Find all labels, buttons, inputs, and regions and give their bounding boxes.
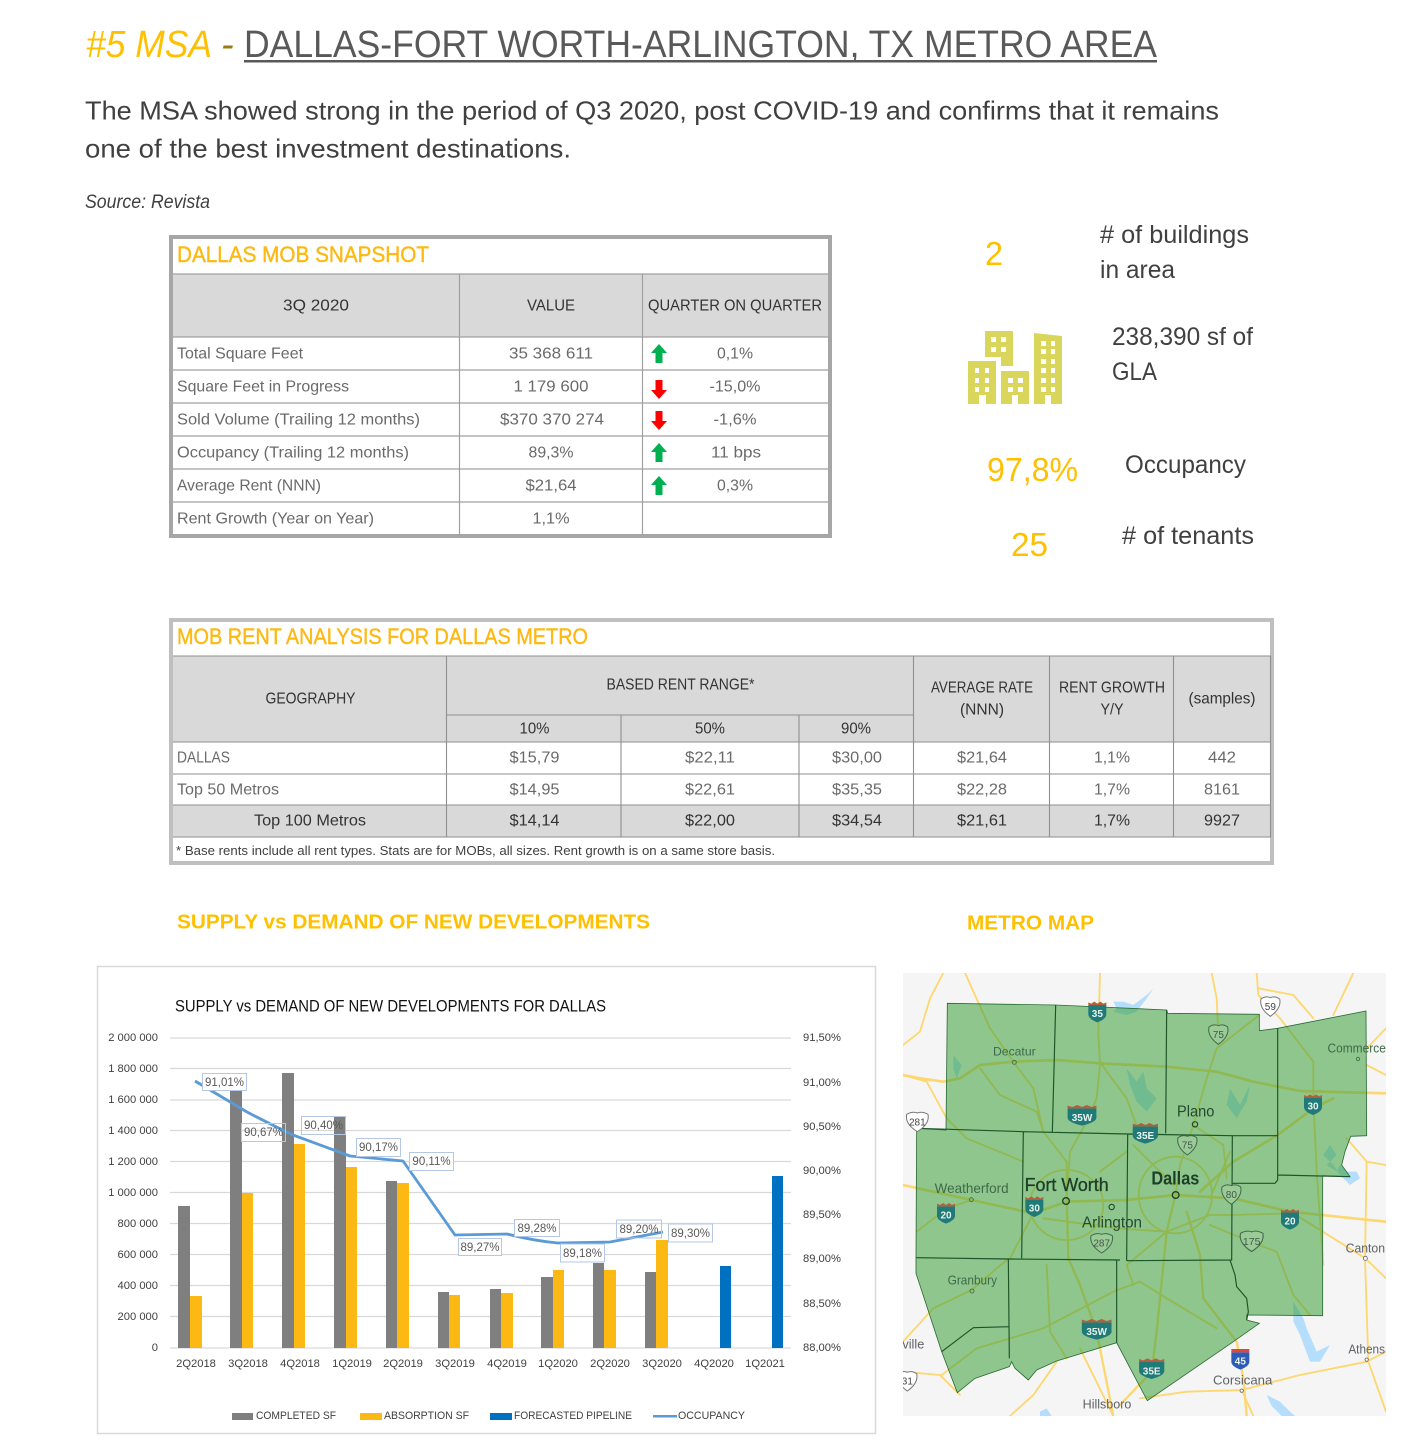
row: Top 100 Metros: Top 100 Metros <box>254 813 366 830</box>
absorption SF bars <box>190 1144 668 1348</box>
occupancy data labels: 89,18% <box>563 1248 602 1260</box>
map interstate shields: 35E <box>1136 1131 1155 1142</box>
chart legend: OCCUPANCY <box>678 1410 746 1422</box>
right axis labels <box>803 1032 841 1354</box>
row: Dallas: $21,64 <box>957 749 1007 766</box>
row: Top 100 Metros: 1,7% <box>1094 813 1130 830</box>
map interstate shields: 30 <box>1307 1102 1319 1113</box>
quarter on quarter values: 0,3% <box>717 477 753 494</box>
category axis labels <box>176 1358 785 1370</box>
map roads <box>903 973 1386 1416</box>
occupancy data labels: 89,20% <box>619 1224 659 1236</box>
map place labels: Canton <box>1346 1241 1385 1255</box>
map county borders <box>916 1005 1350 1358</box>
map county overlay <box>916 1003 1367 1401</box>
map place labels <box>902 1041 1386 1412</box>
forecasted pipeline bars <box>720 1176 783 1348</box>
snapshot row labels: Occupancy (Trailing 12 months) <box>177 444 409 461</box>
title: DALLAS-FORT WORTH-ARLINGTON, TX METRO AREA <box>244 24 1158 66</box>
category axis labels: 2Q2019 <box>383 1358 423 1370</box>
left axis labels: 400 000 <box>118 1280 158 1292</box>
row: Top 50 Metros: $35,35 <box>832 781 882 798</box>
map US route shields: 287 <box>1093 1239 1110 1250</box>
map US route shields: 59 <box>1265 1002 1276 1013</box>
table footnote: * Base rents include all rent types. Stats are for MOBs, all sizes. Rent growth is on a same store basis. <box>176 843 775 858</box>
rent analysis header: 10% <box>520 721 550 738</box>
map place labels: Plano <box>1177 1103 1214 1120</box>
occupancy data labels: 89,28% <box>517 1223 557 1235</box>
intro text: one of the best investment destinations. <box>85 134 571 164</box>
map US route shields: 281 <box>909 1117 926 1128</box>
map place labels: ville <box>902 1337 924 1351</box>
category axis labels: 4Q2019 <box>487 1358 527 1370</box>
category axis labels: 4Q2020 <box>694 1358 734 1370</box>
category axis labels: 3Q2019 <box>435 1358 475 1370</box>
heading: metro map: METRO MAP <box>967 912 1094 934</box>
stat: occupancy: Occupancy <box>1125 451 1246 479</box>
map US route shields: 80 <box>1226 1190 1237 1201</box>
right axis labels: 90,00% <box>803 1165 841 1177</box>
map interstate shields: 35W <box>1086 1327 1108 1338</box>
rent analysis header: BASED RENT RANGE* <box>606 677 754 694</box>
title: #5 MSA <box>86 24 212 66</box>
map place labels: Corsicana <box>1213 1372 1273 1387</box>
snapshot row labels: Square Feet in Progress <box>177 378 349 395</box>
rent analysis header: (NNN) <box>960 702 1004 719</box>
quarter on quarter values: 0,1% <box>717 345 753 362</box>
row: Top 50 Metros: $22,61 <box>685 781 735 798</box>
left axis labels: 800 000 <box>118 1218 158 1230</box>
rent analysis header: RENT GROWTH <box>1059 680 1165 697</box>
row: Top 50 Metros <box>177 781 1240 798</box>
row: Dallas: 1,1% <box>1094 749 1130 766</box>
category axis labels: 4Q2018 <box>280 1358 320 1370</box>
left axis labels: 600 000 <box>118 1249 158 1261</box>
source note: Source: Revista <box>85 192 210 213</box>
rent analysis header <box>266 677 1256 738</box>
category axis labels: 1Q2019 <box>332 1358 372 1370</box>
panel: metro map <box>902 973 1386 1416</box>
completed SF bars <box>178 1073 656 1348</box>
panel: Dallas MOB snapshot table <box>171 237 830 536</box>
occupancy data labels: 90,67% <box>244 1127 283 1139</box>
category axis labels: 3Q2020 <box>642 1358 682 1370</box>
left axis labels: 1 800 000 <box>108 1063 158 1075</box>
row: Top 100 Metros: $14,14 <box>510 813 560 830</box>
chart legend <box>232 1410 746 1422</box>
left axis labels: 2 000 000 <box>108 1032 158 1044</box>
quarter on quarter values <box>710 345 761 494</box>
map US route shields: 75 <box>1182 1141 1193 1152</box>
row: Top 100 Metros: $22,00 <box>685 813 735 830</box>
row: Top 50 Metros: $14,95 <box>510 781 560 798</box>
right axis labels: 90,50% <box>803 1121 841 1133</box>
panel: MOB rent analysis table <box>171 620 1272 863</box>
row: Top 50 Metros: Top 50 Metros <box>177 781 279 798</box>
map interstate shields: 35W <box>1072 1113 1093 1124</box>
left axis labels: 0 <box>152 1342 158 1354</box>
stat: buildings: 2 <box>985 235 1003 272</box>
rent analysis header: 90% <box>841 721 871 738</box>
map US route shields <box>898 997 1280 1391</box>
row: Top 50 Metros: 1,7% <box>1094 781 1130 798</box>
snapshot header row <box>283 298 822 315</box>
stat: buildings: # of buildings <box>1100 221 1249 249</box>
rent analysis header: (samples) <box>1188 691 1256 708</box>
snapshot row labels <box>177 345 420 527</box>
right axis labels: 89,50% <box>803 1209 841 1221</box>
stat: tenants: # of tenants <box>1122 522 1254 550</box>
stat: buildings: in area <box>1100 256 1175 284</box>
quarter on quarter values: 11 bps <box>711 444 761 461</box>
snapshot heading: DALLAS MOB SNAPSHOT <box>177 242 429 267</box>
snapshot values: $21,64 <box>526 477 577 494</box>
rent analysis heading: MOB RENT ANALYSIS FOR DALLAS METRO <box>177 624 588 649</box>
row: Dallas: $15,79 <box>510 749 560 766</box>
occupancy data labels: 89,27% <box>460 1242 500 1254</box>
row: Dallas: DALLAS <box>177 749 230 766</box>
map interstate shields: 45 <box>1235 1356 1246 1367</box>
right axis labels: 88,50% <box>803 1298 841 1310</box>
category axis labels: 3Q2018 <box>228 1358 268 1370</box>
row: Top 100 Metros <box>254 813 1240 830</box>
panel: building stats <box>968 221 1254 563</box>
rent analysis header: GEOGRAPHY <box>266 691 356 708</box>
stat: occupancy <box>987 451 1246 488</box>
snapshot values: 1,1% <box>532 510 570 527</box>
left axis labels: 1 400 000 <box>108 1125 158 1137</box>
map place labels: Commerce <box>1328 1041 1386 1055</box>
quarter on quarter values: -15,0% <box>710 378 760 395</box>
map water <box>953 988 1360 1416</box>
left axis labels: 200 000 <box>118 1311 158 1323</box>
right axis labels: 89,00% <box>803 1253 841 1265</box>
map interstate shields: 20 <box>1284 1216 1296 1227</box>
snapshot values <box>500 345 604 527</box>
map place labels: Decatur <box>993 1045 1036 1059</box>
stat: GLA <box>1112 323 1253 386</box>
snapshot values: 1 179 600 <box>514 378 589 395</box>
map place labels: Fort Worth <box>1025 1174 1109 1195</box>
row: Top 100 Metros: 9927 <box>1204 813 1240 830</box>
left axis labels: 1 200 000 <box>108 1156 158 1168</box>
snapshot row labels: Sold Volume (Trailing 12 months) <box>177 411 420 428</box>
map interstate shields: 30 <box>1029 1204 1040 1215</box>
occupancy data labels: 90,11% <box>412 1156 451 1168</box>
right axis labels: 88,00% <box>803 1342 841 1354</box>
row: Dallas: 442 <box>1208 749 1236 766</box>
row: Dallas <box>177 749 1236 766</box>
map place labels: Hillsboro <box>1083 1398 1131 1412</box>
icon: buildings <box>968 331 1062 404</box>
row: Top 100 Metros: $34,54 <box>832 813 882 830</box>
panel: supply vs demand chart <box>98 966 876 1434</box>
row: Dallas: $22,11 <box>685 749 735 766</box>
occupancy data labels: 91,01% <box>205 1077 244 1089</box>
map interstate shields <box>937 1002 1322 1379</box>
map interstate shields: 35E <box>1143 1366 1161 1377</box>
row: Top 100 Metros: $21,61 <box>957 813 1007 830</box>
category axis labels: 2Q2018 <box>176 1358 216 1370</box>
stat: GLA: GLA <box>1112 358 1157 386</box>
quarter on quarter values: -1,6% <box>714 411 756 428</box>
chart legend: ABSORPTION SF <box>384 1410 469 1422</box>
snapshot values: $370 370 274 <box>500 411 604 428</box>
snapshot header row: VALUE <box>527 298 575 315</box>
row: Dallas: $30,00 <box>832 749 882 766</box>
intro text: The MSA showed strong in the period of Q3 2020, post COVID-19 and confirms that it remains <box>85 96 1219 126</box>
occupancy data labels <box>202 1074 712 1262</box>
snapshot header row: 3Q 2020 <box>283 298 349 315</box>
chart legend: FORECASTED PIPELINE <box>514 1410 632 1422</box>
category axis labels: 1Q2020 <box>538 1358 578 1370</box>
occupancy data labels: 89,30% <box>671 1228 710 1240</box>
category axis labels: 2Q2020 <box>590 1358 630 1370</box>
occupancy line <box>195 1081 663 1243</box>
right axis labels: 91,50% <box>803 1032 841 1044</box>
map place labels: Granbury <box>948 1273 998 1287</box>
snapshot values: 35 368 611 <box>509 345 593 362</box>
intro text <box>85 96 1219 164</box>
stat: tenants: 25 <box>1011 526 1048 563</box>
stat: occupancy: 97,8% <box>987 451 1078 488</box>
rent analysis header: 50% <box>695 721 725 738</box>
map US route shields: 75 <box>1213 1030 1224 1041</box>
left axis labels: 1 600 000 <box>108 1094 158 1106</box>
chart title: SUPPLY vs DEMAND OF NEW DEVELOPMENTS FOR DALLAS <box>175 998 606 1016</box>
left axis labels <box>108 1032 158 1354</box>
stat: buildings <box>985 221 1249 284</box>
heading: supply vs demand: SUPPLY vs DEMAND OF NEW DEVELOPMENTS <box>177 912 650 934</box>
stat: GLA: 238,390 sf of <box>1112 323 1253 351</box>
occupancy data labels: 90,40% <box>304 1120 343 1132</box>
icons: trend arrows <box>651 344 667 495</box>
map place labels: Athens <box>1348 1342 1385 1356</box>
left axis labels: 1 000 000 <box>108 1187 158 1199</box>
map US route shields: 175 <box>1243 1236 1261 1248</box>
map US route shields: 31 <box>902 1377 913 1388</box>
rent analysis header: Y/Y <box>1100 702 1124 719</box>
title: - <box>221 24 234 66</box>
right axis labels: 91,00% <box>803 1077 841 1089</box>
category axis labels: 1Q2021 <box>745 1358 785 1370</box>
chart legend: COMPLETED SF <box>256 1410 336 1422</box>
map place labels: Weatherford <box>935 1180 1009 1196</box>
row: Top 50 Metros: 8161 <box>1204 781 1240 798</box>
map interstate shields: 20 <box>940 1210 952 1221</box>
row: Top 50 Metros: $22,28 <box>957 781 1007 798</box>
map place labels: Dallas <box>1151 1168 1199 1189</box>
stat: tenants <box>1011 522 1254 563</box>
snapshot row labels: Average Rent (NNN) <box>177 477 321 494</box>
map interstate shields: 35 <box>1092 1009 1103 1020</box>
snapshot values: 89,3% <box>528 444 574 461</box>
map place labels: Arlington <box>1082 1214 1142 1231</box>
snapshot row labels: Total Square Feet <box>177 345 304 362</box>
rent analysis header: AVERAGE RATE <box>931 680 1033 697</box>
snapshot row labels: Rent Growth (Year on Year) <box>177 510 374 527</box>
occupancy data labels: 90,17% <box>359 1142 398 1154</box>
snapshot header row: QUARTER ON QUARTER <box>648 298 822 315</box>
